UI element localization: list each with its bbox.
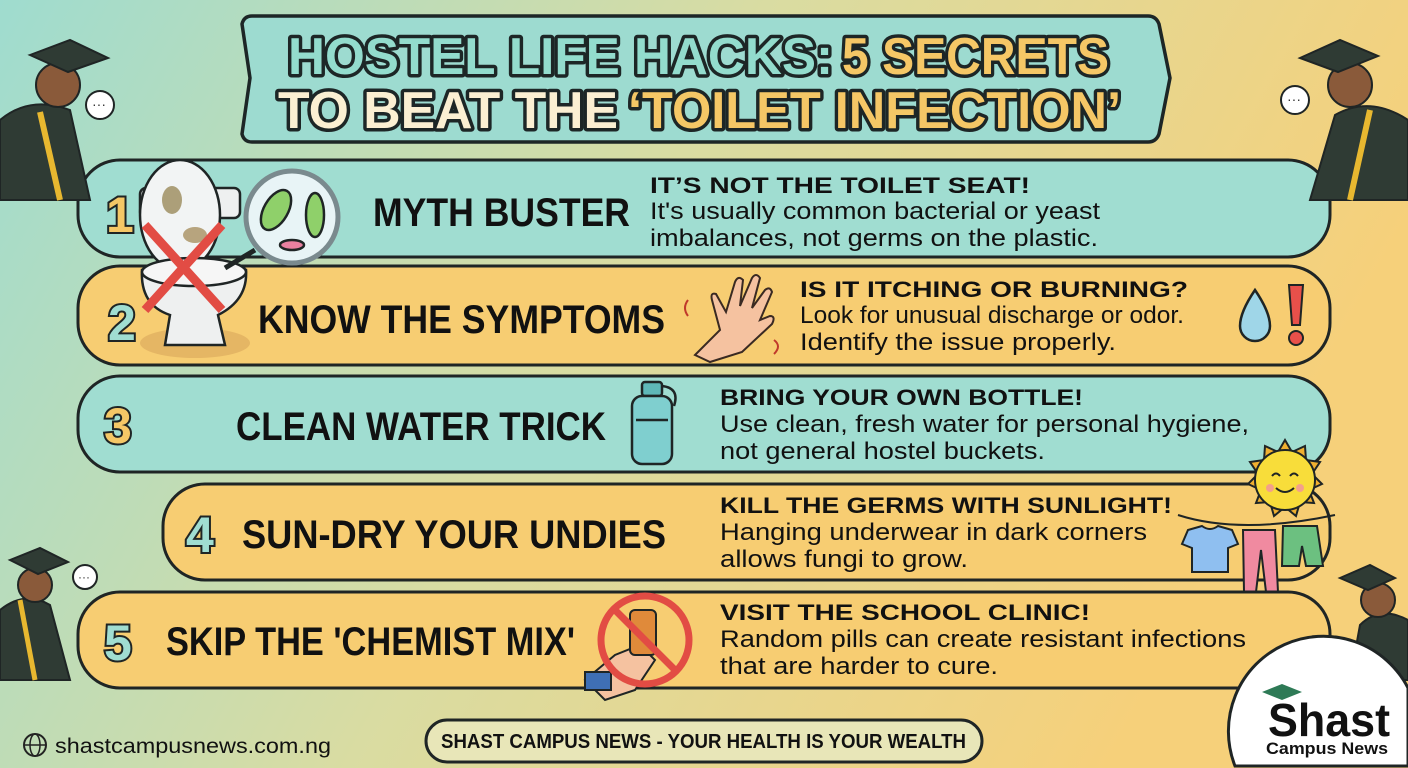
icon: sun and clothesline	[1178, 440, 1335, 592]
description 3: Use clean, fresh water for personal hygiene,	[720, 411, 1249, 438]
footer tagline pill: SHAST CAMPUS NEWS - YOUR HEALTH IS YOUR WEALTH	[441, 731, 966, 753]
row 5 panel	[78, 592, 1330, 700]
description 5	[720, 600, 1246, 680]
description 4: Hanging underwear in dark corners	[720, 519, 1147, 546]
description 3	[720, 385, 1249, 465]
heading: sun-dry your undies: SUN-DRY YOUR UNDIES	[242, 513, 666, 557]
logo: Shast Campus News	[1228, 636, 1408, 766]
graduate top-right: ···	[1287, 91, 1301, 107]
title banner	[242, 16, 1170, 142]
graduate top-left	[0, 40, 114, 200]
description 5: that are harder to cure.	[720, 653, 998, 680]
description 1: imbalances, not germs on the plastic.	[650, 225, 1098, 252]
icon: drop and exclamation	[1240, 285, 1303, 345]
graduate bottom-left: ···	[78, 570, 90, 584]
description 1	[650, 173, 1100, 252]
icon: no pills sign	[585, 596, 689, 700]
title banner: TO BEAT THE	[278, 82, 618, 140]
number 5: 5	[104, 615, 132, 671]
description 1: IT’S NOT THE TOILET SEAT!	[650, 173, 1030, 198]
row 2 panel	[78, 266, 1330, 365]
icon: itchy hand	[685, 275, 778, 362]
description 4: KILL THE GERMS WITH SUNLIGHT!	[720, 493, 1172, 518]
heading: myth buster: MYTH BUSTER	[373, 191, 630, 235]
description 2	[800, 277, 1188, 356]
description 4	[720, 493, 1172, 573]
graduate bottom-right	[1340, 565, 1408, 680]
description 5: VISIT THE SCHOOL CLINIC!	[720, 600, 1090, 625]
number 3: 3	[104, 398, 132, 454]
heading: know the symptoms: KNOW THE SYMPTOMS	[258, 298, 665, 342]
row 4 panel	[163, 484, 1330, 580]
title banner: HOSTEL LIFE HACKS:	[288, 28, 833, 86]
graduate bottom-left	[0, 548, 97, 680]
heading: clean water trick: CLEAN WATER TRICK	[236, 405, 606, 449]
description 3: not general hostel buckets.	[720, 438, 1045, 465]
description 2: Look for unusual discharge or odor.	[800, 302, 1184, 329]
title banner: 5 SECRETS	[842, 28, 1109, 86]
description 2: Identify the issue properly.	[800, 329, 1116, 356]
number 2: 2	[108, 295, 136, 351]
number 4: 4	[186, 507, 214, 563]
description 4: allows fungi to grow.	[720, 546, 968, 573]
icon: water bottle	[632, 382, 676, 464]
graduate top-left: ···	[92, 96, 106, 112]
footer website: shastcampusnews.com.ng	[55, 735, 331, 758]
row 1 panel	[78, 160, 1330, 257]
description 5: Random pills can create resistant infections	[720, 626, 1246, 653]
footer tagline pill	[426, 720, 982, 762]
logo: Shast Campus News: Campus News	[1266, 739, 1388, 758]
title banner: ‘TOILET INFECTION’	[628, 82, 1121, 140]
description 2: IS IT ITCHING OR BURNING?	[800, 277, 1188, 302]
logo: Shast Campus News: Shast	[1268, 694, 1390, 746]
icon: magnifier with bacteria	[225, 171, 338, 268]
graduate top-right	[1281, 40, 1408, 200]
row 3 panel	[78, 376, 1330, 472]
icon: toilet with red X	[140, 160, 250, 358]
heading: skip the chemist mix: SKIP THE 'CHEMIST MIX'	[166, 620, 575, 664]
description 3: BRING YOUR OWN BOTTLE!	[720, 385, 1083, 410]
description 1: It's usually common bacterial or yeast	[650, 198, 1100, 225]
number 1: 1	[106, 187, 134, 243]
